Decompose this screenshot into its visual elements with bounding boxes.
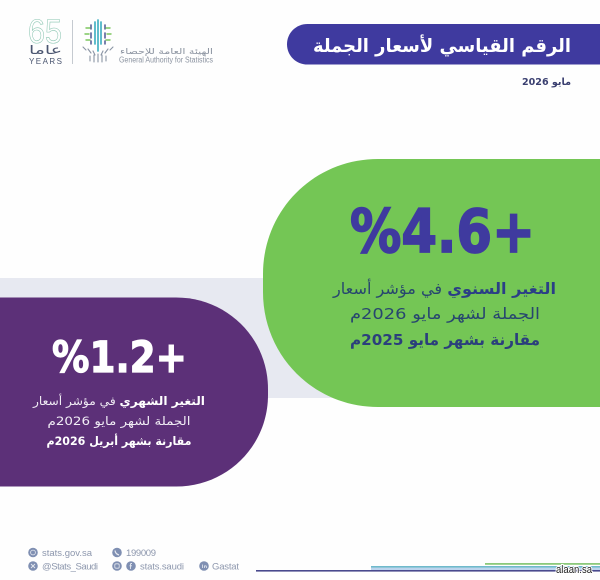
annual description: التغير السنوي في مؤشر أسعار [332,278,556,299]
monthly description: الجملة لشهر مايو 2026م [48,414,190,429]
logo divider [72,20,73,64]
phone: 199009 [126,548,156,559]
logo: authority name [119,47,213,64]
linkedin [199,561,239,572]
annual description: مقارنة بشهر مايو 2025م [350,331,540,349]
panel: monthly change [0,298,268,486]
monthly description [32,393,205,449]
panel: annual change [263,159,600,407]
instagram and facebook [112,561,184,572]
monthly description: التغير الشهري في مؤشر أسعار [32,393,205,409]
logo: authority name: الهيئة العامة للإحصاء [120,47,213,57]
phone [112,548,156,559]
background band [0,278,390,398]
website: stats.gov.sa [42,548,93,559]
monthly description: مقارنة بشهر أبريل 2026م [46,433,192,449]
linkedin: Gastat [212,562,239,572]
monthly value: %1.2+ [52,333,187,383]
x account: @Stats_Saudi [42,562,98,572]
annual description [332,278,556,349]
logo: 65 years: YEARS [29,57,62,66]
watermark: alaan.sa [556,564,593,576]
annual value: %4.6+ [350,197,535,267]
footer contacts [28,548,239,572]
date: مايو 2026 [522,77,571,88]
annual description: الجملة لشهر مايو 2026م [350,305,540,324]
footer stripes [256,563,600,572]
title banner [287,24,600,64]
logo: 65 years: 65 [28,13,62,51]
logo: authority name: General Authority for Statistics [119,56,213,64]
instagram and facebook: stats.saudi [140,562,184,572]
title: الرقم القياسي لأسعار الجملة [313,34,571,57]
logo: 65 years [28,13,62,66]
logo: authority emblem [83,20,113,62]
logo: 65 years: عاما [29,43,62,57]
